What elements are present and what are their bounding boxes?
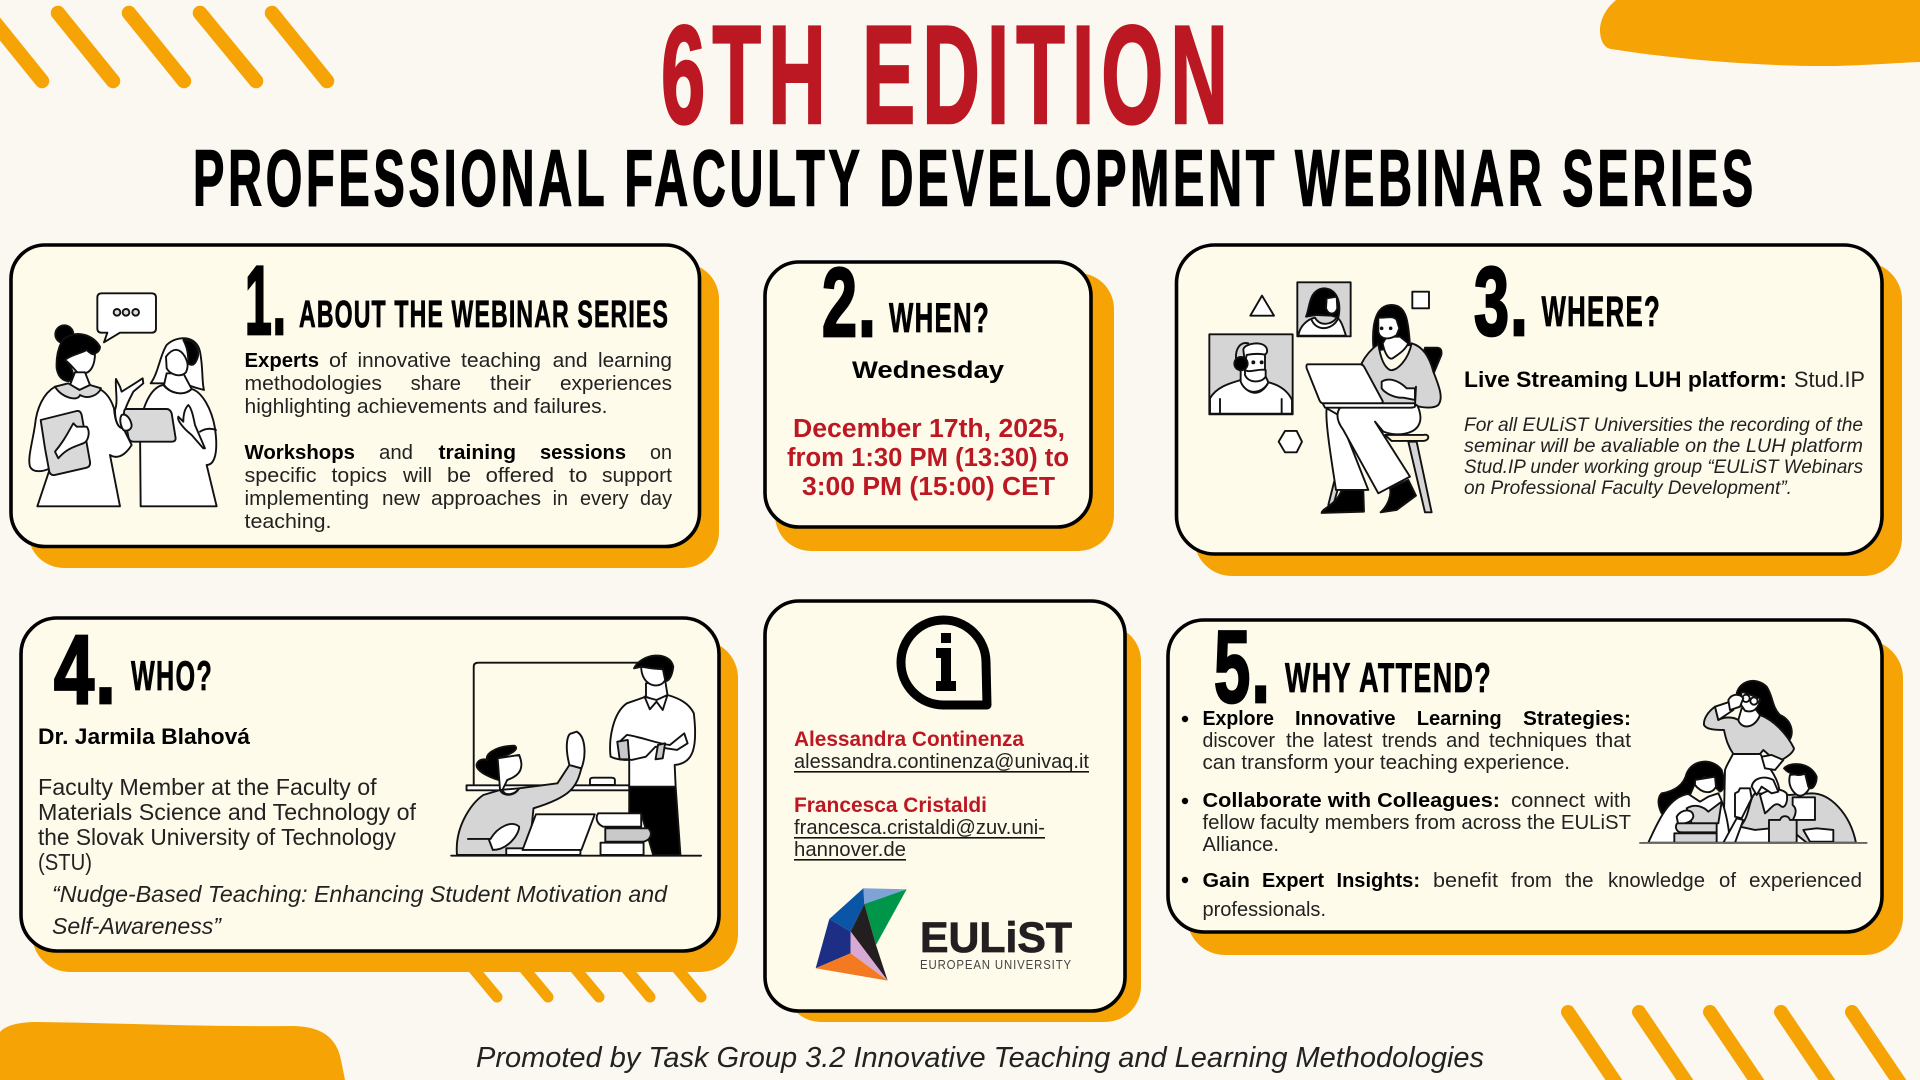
speaker affiliation: Materials Science and Technology of — [38, 799, 417, 825]
text block: workshops: new — [382, 487, 420, 510]
day of week: Wednesday — [852, 357, 1005, 384]
text block: experts: and — [553, 349, 588, 372]
decoration: bottom-centre orange stripes — [462, 955, 701, 997]
text block: experts: highlighting achievements and failures. — [244, 395, 608, 418]
bullet: gain expert insights — [1182, 869, 1862, 921]
text block: workshops: specific — [244, 464, 316, 487]
footer credit: Promoted by Task Group 3.2 Innovative Teaching and Learning Methodologies — [476, 1042, 1484, 1074]
contact: Alessandra Continenza: alessandra.continenza@univaq.it — [794, 751, 1089, 773]
recording note: Stud.IP under working group “EULiST Webinars — [1464, 456, 1863, 478]
bullet: gain expert insights: professionals. — [1202, 898, 1326, 921]
seminar title — [52, 881, 668, 939]
panel 5: why attend — [1168, 610, 1903, 955]
bullet: gain expert insights: Gain — [1202, 869, 1250, 892]
logo: EULiST: EULiST — [920, 914, 1072, 962]
platform line: Live Streaming LUH platform: — [1464, 367, 1787, 392]
text block: workshops: topics — [332, 464, 387, 487]
contact: Francesca Cristaldi: hannover.de — [794, 839, 906, 861]
date and time: from 1:30 PM (13:30) to — [787, 444, 1069, 472]
bullet: collaborate with colleagues: connect — [1511, 789, 1585, 812]
panel 1: about the webinar series: 1. — [245, 246, 287, 355]
text block: workshops: teaching. — [244, 510, 332, 533]
bullet: gain expert insights: of — [1719, 869, 1736, 892]
text block: workshops: Workshops — [244, 441, 355, 464]
speaker affiliation: the Slovak University of Technology — [38, 824, 396, 850]
icon: info speech drop — [901, 620, 987, 705]
text block: workshops: to — [569, 464, 588, 487]
icon: teacher and student at blackboard — [451, 656, 701, 856]
text block: workshops: and — [379, 441, 413, 464]
seminar title: “Nudge-Based Teaching: Enhancing Student Motivation and — [52, 881, 668, 907]
bullet: explore innovative learning strategies: Strategies: — [1523, 707, 1631, 730]
heading: where: WHERE? — [1542, 288, 1661, 336]
recording note: For all EULiST Universities the recording of the — [1464, 414, 1863, 436]
bullet: explore innovative learning strategies: techniques — [1489, 729, 1587, 752]
text block: experts: of — [329, 349, 347, 372]
heading number 5: 5. — [1214, 610, 1271, 724]
bullet: gain expert insights: the — [1565, 869, 1594, 892]
heading number 3: 3. — [1474, 247, 1529, 356]
speaker affiliation — [38, 774, 417, 875]
bullet: explore innovative learning strategies: the — [1286, 729, 1314, 752]
bullet: explore innovative learning strategies: latest — [1323, 729, 1373, 752]
text block: workshops: support — [602, 464, 672, 487]
bullet: explore innovative learning strategies: discover — [1202, 729, 1275, 752]
bullet: explore innovative learning strategies — [1182, 707, 1631, 774]
panel 3: where — [1176, 245, 1902, 576]
text block: workshops: offered — [486, 464, 554, 487]
text block: experts — [244, 349, 672, 418]
contact: Francesca Cristaldi: francesca.cristaldi@zuv.uni- — [794, 817, 1045, 839]
icon: two women talking with tablets — [29, 293, 217, 506]
text block: experts: teaching — [461, 349, 541, 372]
heading: why attend: WHY ATTEND? — [1285, 654, 1492, 701]
speaker affiliation: (STU) — [38, 849, 92, 875]
bullet: gain expert insights: from — [1511, 869, 1552, 892]
bullet: collaborate with colleagues: Alliance. — [1202, 833, 1279, 856]
bullet: explore innovative learning strategies: trends — [1382, 729, 1437, 752]
text block: workshops: training — [438, 441, 516, 464]
bullet: gain expert insights: Insights: — [1336, 869, 1420, 892]
text block: experts: experiences — [560, 372, 672, 395]
heading number 4: 4. — [54, 615, 117, 724]
heading number 2: 2. — [822, 248, 877, 357]
text block: workshops: sessions — [540, 441, 626, 464]
bullet: collaborate with colleagues: Collaborate with Colleagues: — [1202, 789, 1500, 812]
text block: workshops: every — [580, 487, 629, 510]
date and time: 3:00 PM (15:00) CET — [802, 473, 1055, 501]
text block: experts: learning — [598, 349, 672, 372]
text block: workshops: day — [640, 487, 673, 510]
date and time: December 17th, 2025, — [793, 415, 1065, 443]
speaker affiliation: Faculty Member at the Faculty of — [38, 774, 377, 800]
bullet: collaborate with colleagues — [1182, 789, 1631, 856]
contact: Alessandra Continenza — [794, 727, 1089, 773]
bullet: explore innovative learning strategies: Explore — [1202, 707, 1274, 730]
heading: about the webinar series: ABOUT THE WEBINAR SERIES — [299, 294, 669, 336]
decoration: bottom-right orange stripes — [1568, 1012, 1906, 1080]
decoration: top-left orange stripes — [0, 13, 327, 81]
bullet: gain expert insights: experienced — [1749, 869, 1862, 892]
recording note: seminar will be avaliable on the LUH platform — [1464, 435, 1863, 457]
icon: woman on laptop in a video call — [1209, 282, 1442, 513]
title: 6TH EDITION — [661, 0, 1235, 153]
text block: experts: innovative — [358, 349, 451, 372]
text block: workshops: will — [402, 464, 432, 487]
heading: when: WHEN? — [889, 294, 990, 341]
recording note — [1464, 414, 1863, 499]
panel 4: who — [21, 615, 738, 972]
panel 1: about the webinar series — [11, 245, 719, 568]
bullet: explore innovative learning strategies: that — [1596, 729, 1631, 752]
heading: who: WHO? — [131, 652, 213, 699]
bullet: explore innovative learning strategies: and — [1446, 729, 1480, 752]
text block: workshops — [244, 441, 673, 533]
contact: Francesca Cristaldi: Francesca Cristaldi — [794, 793, 987, 817]
bullet: explore innovative learning strategies: Learning — [1417, 707, 1502, 730]
bullet: explore innovative learning strategies: can transform your teaching experience. — [1202, 751, 1570, 774]
icon: teacher and students with puzzle — [1640, 681, 1867, 843]
text block: experts: their — [490, 372, 531, 395]
logo: EULiST — [816, 888, 1072, 981]
speaker name: Dr. Jarmila Blahová — [38, 724, 251, 749]
contact: Francesca Cristaldi — [794, 793, 1045, 861]
text block: workshops: implementing — [244, 487, 369, 510]
contact: Alessandra Continenza: Alessandra Continenza — [794, 727, 1025, 751]
text block: experts: Experts — [244, 349, 319, 372]
text block: experts: methodologies — [244, 372, 382, 395]
bullet: explore innovative learning strategies: Innovative — [1295, 707, 1396, 730]
text block: workshops: on — [650, 441, 672, 464]
text block: workshops: be — [447, 464, 471, 487]
decoration: bottom-left orange blob — [0, 1022, 345, 1080]
panel 2: when — [765, 248, 1114, 551]
seminar title: Self-Awareness” — [52, 913, 222, 939]
bullet: collaborate with colleagues: fellow faculty members from across the EULiST — [1202, 811, 1631, 834]
panel: contact information — [765, 601, 1141, 1022]
date and time — [787, 415, 1069, 501]
text block: workshops: approaches — [431, 487, 541, 510]
bullet: gain expert insights: Expert — [1262, 869, 1324, 892]
recording note: on Professional Faculty Development”. — [1464, 477, 1792, 499]
text block: experts: share — [411, 372, 461, 395]
decoration: top-right orange blob — [1600, 0, 1920, 66]
bullet: gain expert insights: benefit — [1433, 869, 1498, 892]
text block: workshops: in — [553, 487, 568, 510]
bullet: collaborate with colleagues: with — [1593, 789, 1631, 812]
platform line: Stud.IP — [1794, 367, 1865, 392]
logo: EULiST: EUROPEAN UNIVERSITY — [920, 957, 1072, 972]
bullet: gain expert insights: knowledge — [1608, 869, 1705, 892]
